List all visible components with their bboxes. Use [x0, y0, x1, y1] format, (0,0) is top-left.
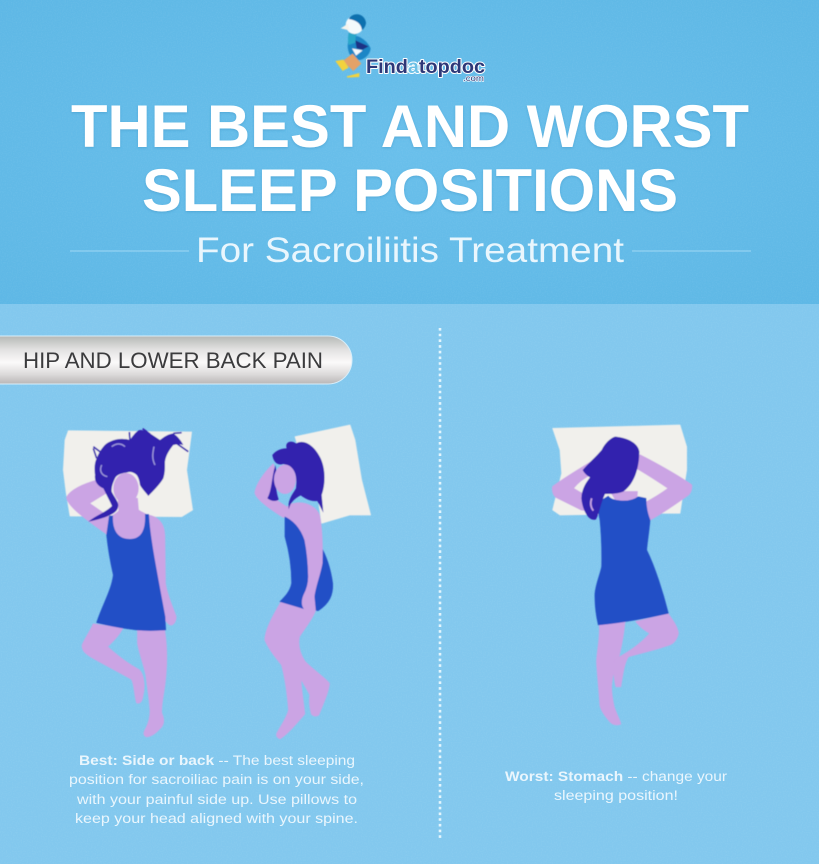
raised arm — [255, 464, 292, 517]
hair — [267, 442, 325, 513]
arms — [552, 457, 602, 512]
dress — [97, 514, 166, 630]
right arm — [147, 515, 176, 625]
title — [71, 93, 749, 224]
title: SLEEP POSITIONS — [142, 157, 678, 224]
text block: best position — [69, 753, 364, 827]
text block: worst position — [505, 769, 727, 804]
legs — [597, 620, 625, 725]
panel: header background — [0, 0, 819, 304]
logo: Findatopdoc — [335, 14, 485, 83]
torso skin — [107, 498, 149, 538]
illustration: woman sleeping on stomach — [552, 425, 692, 725]
hair highlights — [101, 444, 155, 477]
legs — [82, 624, 144, 703]
heading pill: hip and lower back pain: HIP AND LOWER BACK PAIN — [23, 348, 323, 373]
face — [113, 473, 139, 504]
hair highlight — [591, 498, 593, 511]
icon: duck mascot — [335, 14, 371, 78]
dress — [280, 515, 333, 611]
text block: best position: Best: Side or back -- The best sleeping — [79, 753, 355, 769]
logo wordmark: Findatopdoc — [366, 57, 485, 78]
text block: worst position: Worst: Stomach -- change your — [505, 769, 727, 785]
text block: worst position: sleeping position! — [554, 788, 678, 804]
legs — [265, 603, 329, 739]
pillow — [553, 425, 687, 515]
dress — [595, 496, 668, 625]
text block: best position: keep your head aligned with your spine. — [75, 811, 358, 827]
pillow — [63, 431, 193, 517]
illustration: woman sleeping on side — [255, 425, 371, 739]
text block: best position: position for sacroiliac pain is on your side, — [69, 772, 364, 788]
neck — [611, 492, 637, 502]
hair — [88, 429, 188, 522]
logo .com: .com — [463, 74, 484, 83]
illustration: woman sleeping on back — [63, 429, 193, 737]
left arm — [67, 479, 113, 534]
hair strands — [93, 429, 188, 458]
face — [274, 465, 296, 494]
center dotted divider — [439, 328, 441, 838]
text block: best position: with your painful side up. Use pillows to — [76, 792, 357, 808]
panel: lower background — [0, 304, 819, 864]
pillow — [295, 425, 371, 523]
torso and lower arm — [283, 503, 322, 612]
title: THE BEST AND WORST — [71, 93, 749, 160]
heading pill: hip and lower back pain — [0, 336, 352, 384]
hair — [581, 437, 639, 520]
subtitle: For Sacroiliitis Treatment — [196, 230, 624, 270]
